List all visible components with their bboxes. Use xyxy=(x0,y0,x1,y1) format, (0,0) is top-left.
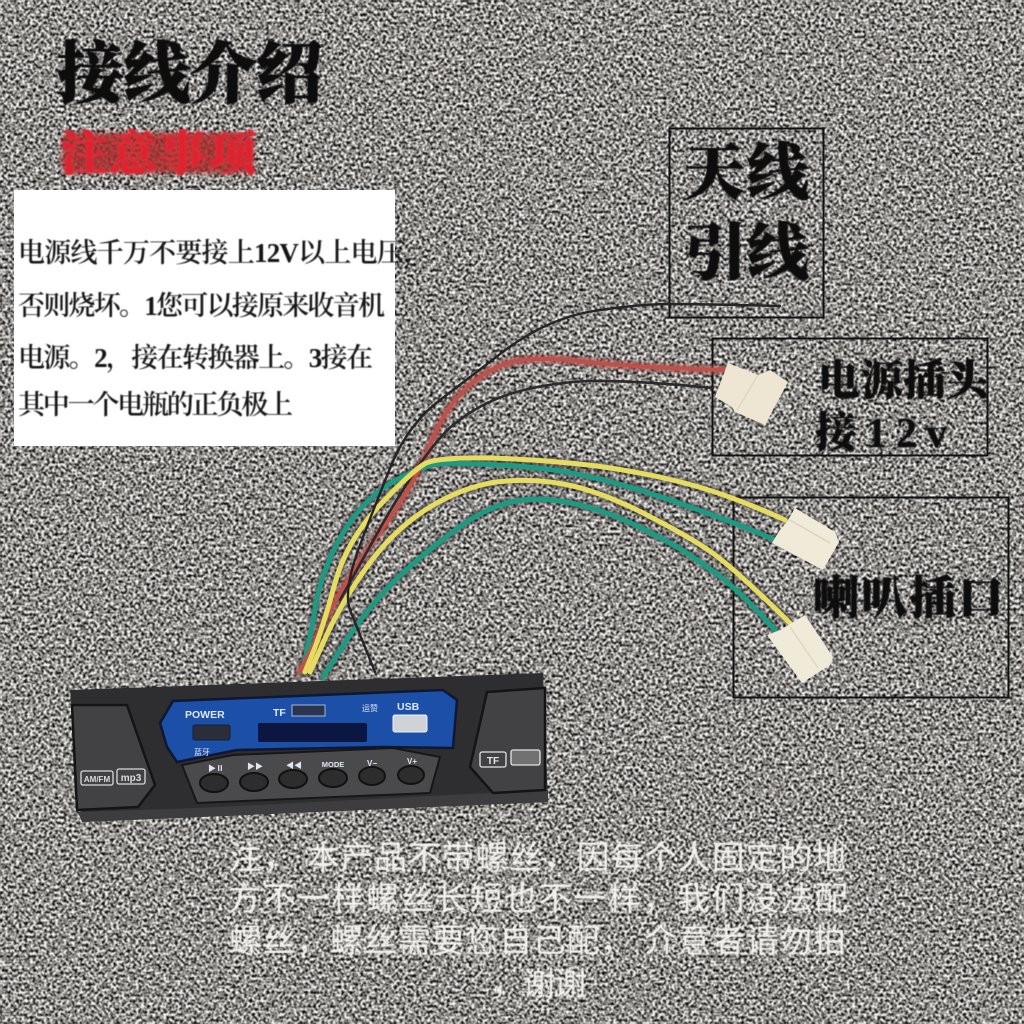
button panel xyxy=(182,748,440,803)
usb port xyxy=(393,715,427,732)
tf slot xyxy=(292,705,325,716)
tf label: TF xyxy=(273,707,286,719)
black power wire xyxy=(340,381,713,600)
button labels: ▶▶ xyxy=(247,762,263,771)
red power wire xyxy=(300,359,723,672)
power label: POWER xyxy=(185,709,225,721)
bluetooth label: 蓝牙 xyxy=(194,747,210,757)
power switch xyxy=(193,725,230,740)
radio module front panel xyxy=(70,673,548,822)
button labels xyxy=(208,757,417,773)
notice text: 电源线千万不要接上12V以上电压， xyxy=(18,238,430,268)
green wire 1 xyxy=(302,463,775,672)
panel: white notice box xyxy=(14,190,430,446)
button labels: V− xyxy=(367,759,377,768)
blue control panel xyxy=(160,690,457,762)
title: 接线介绍 xyxy=(57,38,323,112)
button labels: ◀◀ xyxy=(286,761,302,770)
heading: cautions in red: 注意事项 xyxy=(60,128,259,181)
right end cap xyxy=(470,688,545,793)
callout box: speaker socket: 喇叭插口 xyxy=(813,573,1004,624)
callout box: antenna lead: 引线 xyxy=(685,220,809,288)
badge labels: AM/FM xyxy=(84,775,110,784)
footnote: white note text: 螺丝，螺丝需要您自己配， 介意者请勿拍 xyxy=(229,922,846,959)
connector: speaker plug 1 xyxy=(772,508,839,570)
footnote: white note text xyxy=(228,839,848,1002)
connector: power plug xyxy=(715,363,788,425)
wiring harness xyxy=(300,304,790,677)
callout box: antenna lead xyxy=(670,128,824,318)
display xyxy=(258,723,367,742)
button labels: ▶Ⅱ xyxy=(208,764,224,773)
footnote: white note text: 注， 本产品不带螺丝，因每个人固定的地 xyxy=(229,839,846,876)
callout box: power plug: 电源插头 xyxy=(818,358,993,405)
yellow wire 2 xyxy=(310,480,790,672)
notice text: 其中一个电瓶的正负极上 xyxy=(18,389,293,420)
yellow wire 1 xyxy=(305,458,785,672)
wire halos xyxy=(302,458,790,677)
control buttons xyxy=(200,766,424,792)
usb label: USB xyxy=(397,701,420,713)
badge labels: mp3 xyxy=(121,773,142,784)
callout box: power plug xyxy=(712,338,993,457)
badge labels: TF xyxy=(487,756,499,767)
callout box: power plug: 接12v xyxy=(815,410,947,457)
callout box: speaker socket xyxy=(734,498,1008,698)
notice text xyxy=(18,238,430,420)
connector: speaker plug 2 xyxy=(767,615,833,683)
device body xyxy=(70,673,548,822)
callout box: antenna lead: 天线 xyxy=(683,140,809,208)
left end cap xyxy=(72,705,155,810)
black antenna wire xyxy=(348,304,780,672)
button labels: V+ xyxy=(407,757,417,766)
button labels: MODE xyxy=(322,760,344,769)
badge labels xyxy=(81,750,540,785)
notice text: 否则烧坏。1您可以接原来收音机 xyxy=(18,291,385,321)
green wire 2 xyxy=(323,499,775,677)
footnote: white note text: ，谢谢 xyxy=(491,965,587,1002)
footnote: white note text: 方不一样螺丝长短也不一样，我们没法配 xyxy=(228,880,848,917)
send label: 运赞 xyxy=(362,703,378,713)
notice text: 电源。2，接在转换器上。3接在 xyxy=(18,343,373,373)
red wire halo xyxy=(300,359,723,672)
